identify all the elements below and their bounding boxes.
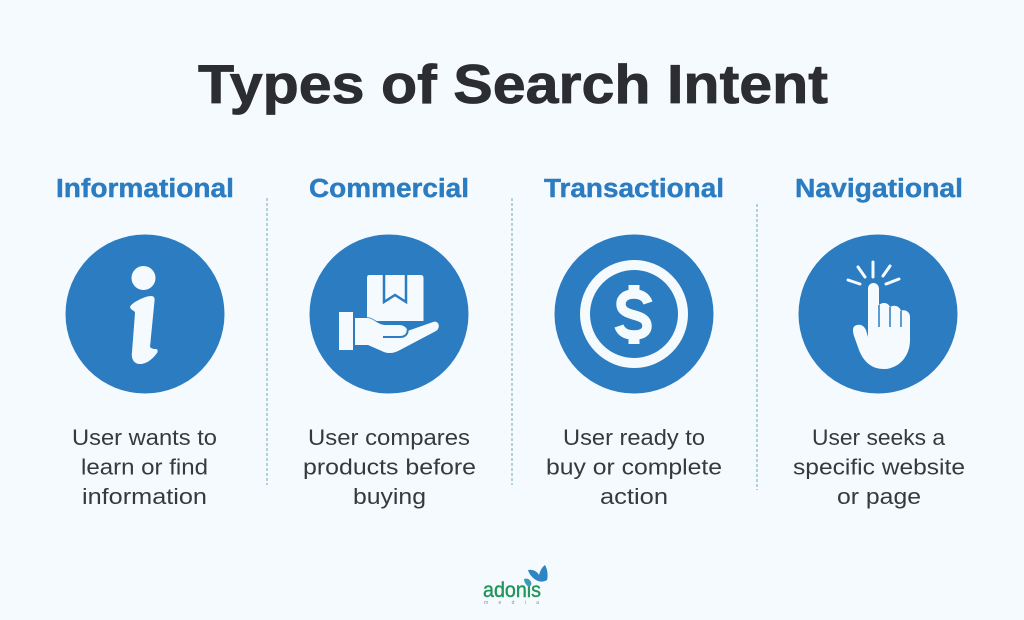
description: informational: information [82, 484, 207, 509]
description: navigational: or page [837, 484, 921, 509]
description: transactional: action [600, 484, 668, 509]
logo wordmark: adonis [483, 579, 541, 602]
description: commercial: products before [303, 454, 476, 480]
heading: commercial: Commercial [309, 175, 469, 203]
description: commercial: buying [353, 484, 426, 509]
logo butterfly [524, 565, 548, 587]
description: navigational [793, 425, 965, 509]
description: informational: learn or find [81, 454, 208, 480]
panel: commercial [303, 175, 476, 509]
icon: information [66, 234, 224, 394]
panel: transactional [544, 175, 724, 509]
panel: informational [56, 175, 234, 509]
icon: pointing hand [798, 234, 958, 394]
description: navigational: User seeks a [812, 425, 946, 450]
heading: informational: Informational [56, 175, 234, 203]
description: transactional: buy or complete [546, 454, 722, 480]
heading: transactional: Transactional [544, 175, 724, 203]
description: transactional: User ready to [563, 425, 705, 450]
logo tagline: media [484, 600, 539, 606]
description: informational [72, 425, 217, 509]
description: commercial [303, 425, 476, 509]
description: navigational: specific website [793, 454, 965, 480]
panel: navigational [793, 175, 965, 509]
icon: dollar coin [554, 234, 714, 394]
title: Types of Search Intent [198, 53, 828, 115]
heading: navigational: Navigational [795, 175, 963, 203]
icon: hand holding package [310, 234, 468, 394]
description: informational: User wants to [72, 425, 217, 450]
description: commercial: User compares [308, 425, 470, 450]
description: transactional [546, 425, 722, 509]
logo: adonis media [483, 565, 548, 606]
